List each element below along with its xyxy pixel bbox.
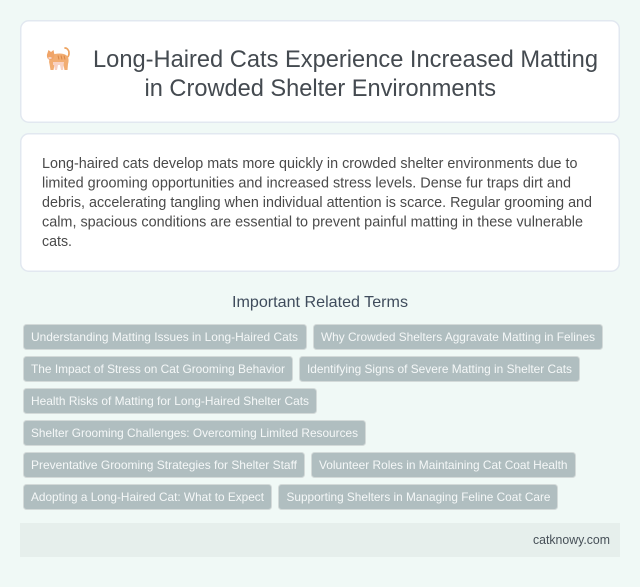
tag: Health Risks of Matting for Long-Haired Shelter Cats	[31, 394, 309, 408]
tag: Why Crowded Shelters Aggravate Matting in Felines	[321, 330, 595, 344]
tag	[314, 324, 602, 350]
tag	[300, 356, 580, 382]
tag	[24, 484, 272, 510]
panel: summary card	[21, 134, 619, 271]
tag	[24, 388, 316, 414]
tag	[312, 452, 576, 478]
tag: Supporting Shelters in Managing Feline Coat Care	[286, 490, 551, 504]
title	[93, 46, 598, 102]
tag	[24, 420, 366, 446]
summary paragraph: calm, spacious conditions are essential to prevent painful matting in these vulnerable	[42, 214, 583, 230]
tag: Volunteer Roles in Maintaining Cat Coat Health	[319, 458, 568, 472]
tag: Identifying Signs of Severe Matting in Shelter Cats	[307, 362, 572, 376]
footer site name: catknowy.com	[533, 533, 610, 547]
title: in Crowded Shelter Environments	[144, 75, 496, 102]
tag: Understanding Matting Issues in Long-Haired Cats	[31, 330, 298, 344]
tag: Preventative Grooming Strategies for Shelter Staff	[31, 458, 298, 472]
tag	[24, 452, 304, 478]
panel: title card	[21, 21, 619, 122]
summary paragraph: limited grooming opportunities and increased stress levels. Dense fur traps dirt and	[42, 176, 571, 192]
summary paragraph: Long-haired cats develop mats more quickly in crowded shelter environments due to	[42, 156, 578, 172]
tag	[24, 356, 292, 382]
tag: Adopting a Long-Haired Cat: What to Expect	[31, 490, 265, 504]
tag	[24, 324, 306, 350]
title: Long-Haired Cats Experience Increased Matting	[93, 46, 598, 73]
footer	[20, 523, 620, 557]
summary paragraph: debris, accelerating tangling when individual attention is scarce. Regular grooming and	[42, 195, 592, 211]
summary paragraph: cats.	[42, 234, 72, 250]
icon: cat	[47, 48, 69, 70]
tag list	[24, 324, 602, 510]
tag: Shelter Grooming Challenges: Overcoming Limited Resources	[31, 426, 358, 440]
heading: related terms: Important Related Terms	[232, 294, 408, 311]
tag	[278, 484, 558, 510]
summary paragraph	[42, 156, 592, 250]
tag: The Impact of Stress on Cat Grooming Behavior	[31, 362, 285, 376]
